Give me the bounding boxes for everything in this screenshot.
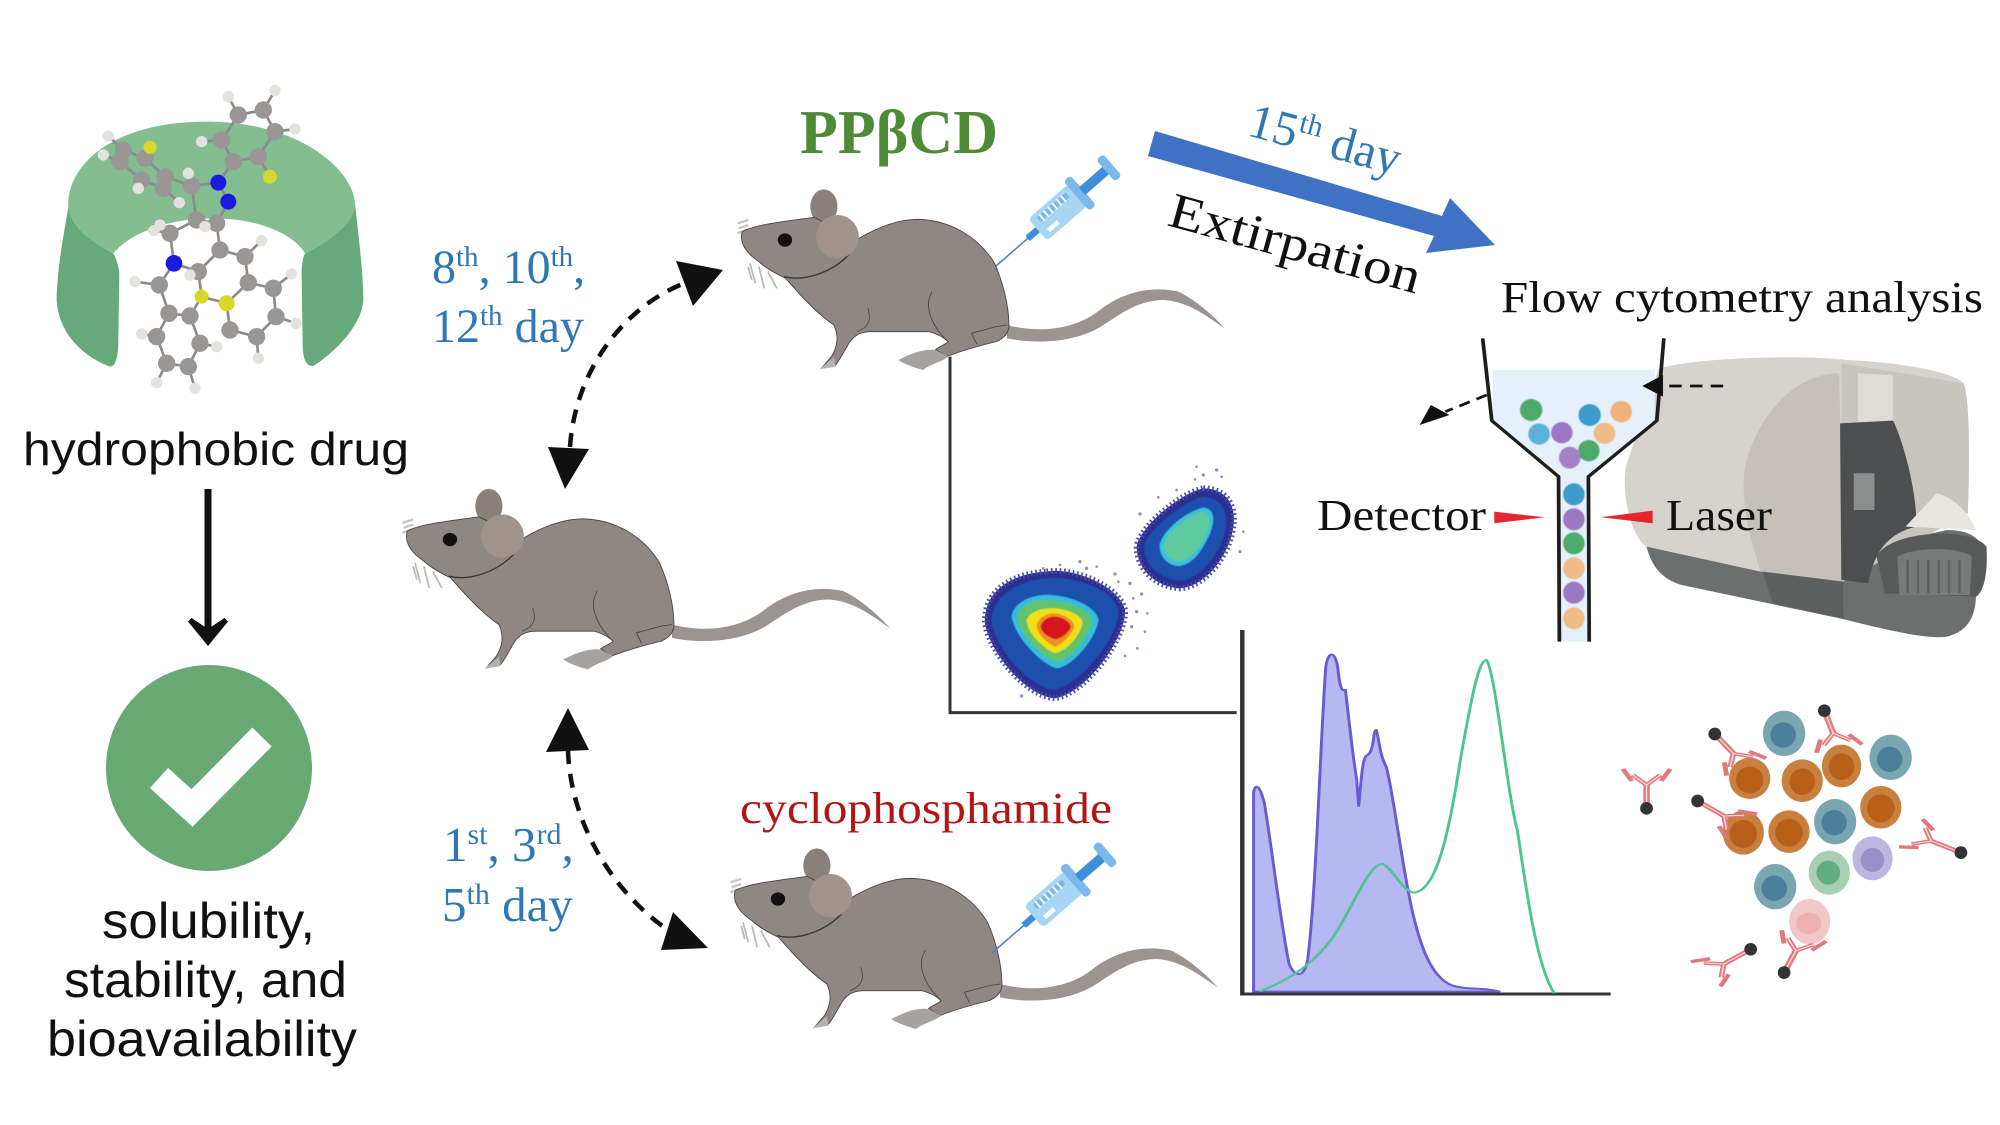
mouse: cyclophosphamide treated bbox=[730, 848, 1218, 1029]
mouse: central control bbox=[402, 489, 890, 669]
text: dosing days 8th 10th 12th: 12 bbox=[432, 300, 480, 353]
arrow: dashed curve between control mouse and PPβCD mouse bbox=[548, 261, 723, 489]
text: solubility, stability, and bioavailability: solubility, bbox=[102, 893, 315, 949]
label: Laser: Laser bbox=[1666, 491, 1772, 540]
text: dosing days 8th 10th 12th: , bbox=[573, 241, 585, 294]
flow cell funnel with cells bbox=[1420, 338, 1723, 642]
label: hydrophobic drug: hydrophobic drug bbox=[23, 423, 409, 475]
arrow: dashed flow in bbox=[1642, 375, 1723, 397]
population: lower gate bbox=[985, 560, 1149, 698]
cell: pink bbox=[1789, 899, 1830, 944]
cell: green bbox=[1809, 851, 1850, 895]
text: dosing days 8th 10th 12th: th bbox=[456, 241, 479, 273]
text: dosing days 1st 3rd 5th: th bbox=[466, 878, 490, 911]
icon: detector red wedge bbox=[1494, 512, 1545, 523]
arrow: blue extirpation arrow bbox=[1148, 131, 1495, 253]
text: dosing days 1st 3rd 5th: , 3 bbox=[488, 817, 537, 872]
cell: purple bbox=[1852, 836, 1893, 880]
molecule: ball-and-stick bbox=[98, 85, 302, 394]
text: solubility, stability, and bioavailability: bioavailability bbox=[47, 1011, 357, 1067]
text: dosing days 1st 3rd 5th: , bbox=[562, 817, 574, 872]
arrow: dashed flow out bbox=[1420, 395, 1487, 425]
cells: orange bbox=[1723, 745, 1901, 855]
text: dosing days 1st 3rd 5th: 1 bbox=[443, 817, 468, 872]
text: dosing days 1st 3rd 5th: day bbox=[490, 877, 573, 932]
text: dosing days 8th 10th 12th bbox=[432, 241, 585, 353]
text: solubility, stability, and bioavailability: stability, and bbox=[64, 952, 347, 1008]
icon: syringe bottom bbox=[979, 837, 1121, 968]
heading: cyclophosphamide: cyclophosphamide bbox=[740, 784, 1112, 833]
series: green line bbox=[1259, 660, 1554, 993]
text: solubility, stability, and bioavailability bbox=[47, 893, 357, 1067]
icon: green check mark circle bbox=[106, 665, 312, 871]
series: purple filled histogram bbox=[1254, 655, 1500, 992]
text: dosing days 1st 3rd 5th: 5 bbox=[442, 877, 466, 932]
cells in funnel bbox=[1520, 399, 1632, 629]
text: dosing days 1st 3rd 5th: st bbox=[468, 818, 488, 851]
text: dosing days 1st 3rd 5th: rd bbox=[537, 818, 562, 851]
mouse: PPβCD treated bbox=[737, 189, 1225, 370]
heading: PPβCD: PPβCD bbox=[800, 99, 998, 167]
heading: Flow cytometry analysis: Flow cytometry analysis bbox=[1501, 273, 1983, 322]
text: dosing days 1st 3rd 5th bbox=[442, 817, 574, 932]
text: dosing days 8th 10th 12th: th bbox=[480, 300, 503, 332]
label: 15th day: th bbox=[1296, 106, 1327, 144]
label: Detector: Detector bbox=[1317, 491, 1486, 540]
flow cytometer machine bbox=[1625, 357, 1987, 637]
cells: teal bbox=[1754, 711, 1912, 909]
text: dosing days 8th 10th 12th: th bbox=[551, 241, 574, 273]
text: dosing days 8th 10th 12th: 8 bbox=[432, 241, 456, 294]
illustration: cells and labelled antibodies bbox=[1623, 704, 1973, 986]
chart: histogram overlay bbox=[1242, 630, 1611, 994]
cup: green truncated cone bbox=[57, 122, 363, 367]
label: 15th day: day bbox=[1313, 111, 1408, 186]
arrow: dashed curve between control mouse and cyclophosphamide mouse bbox=[546, 708, 708, 950]
arrow: drug to solubility bbox=[190, 489, 226, 642]
label: Extirpation: Extirpation bbox=[1163, 182, 1428, 304]
text: dosing days 8th 10th 12th: day bbox=[503, 300, 584, 353]
population: upper gate bbox=[1137, 465, 1245, 588]
icon: laser red wedge bbox=[1601, 511, 1653, 523]
antibodies bbox=[1623, 704, 1973, 986]
chart: density scatter plot bbox=[950, 357, 1245, 713]
text: dosing days 8th 10th 12th: , 10 bbox=[479, 241, 551, 294]
axes bbox=[1242, 630, 1611, 994]
icon: syringe top bbox=[983, 150, 1125, 281]
label: 15th day: 15 bbox=[1243, 92, 1305, 158]
cyclodextrin cup with drug molecule bbox=[57, 85, 363, 394]
